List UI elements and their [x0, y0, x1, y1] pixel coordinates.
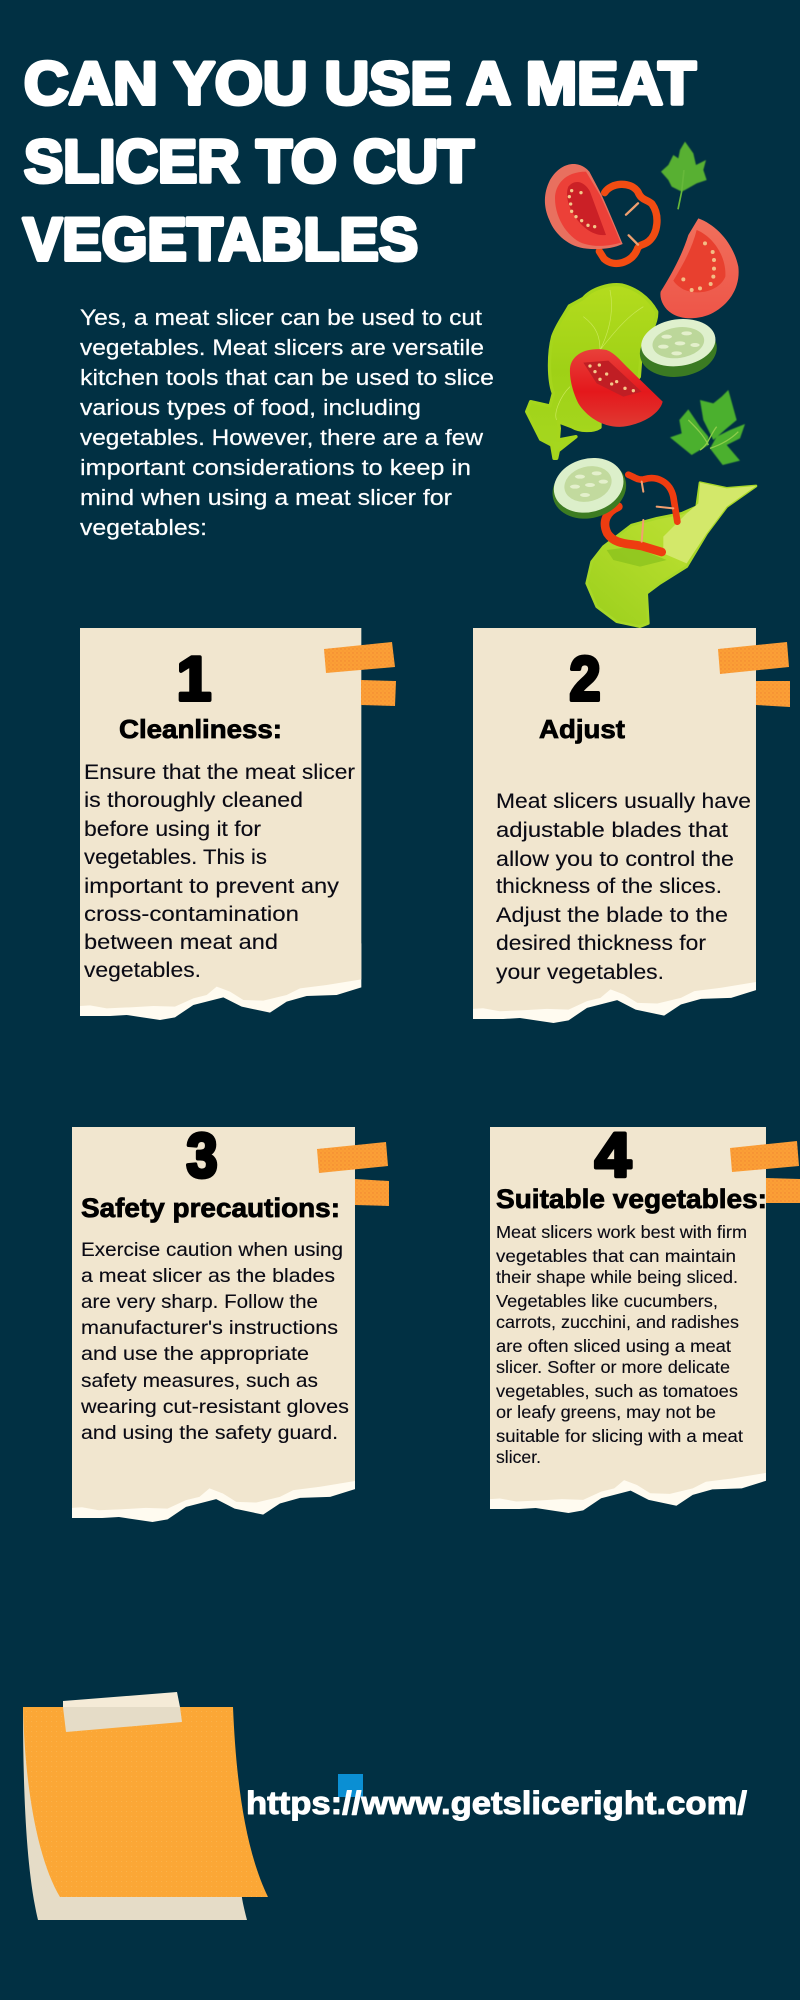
body text [496, 1222, 747, 1467]
title: CAN YOU USE A MEAT [24, 50, 696, 117]
number: 1 [177, 645, 211, 714]
intro text block: important considerations to keep in [80, 455, 471, 480]
body text: thickness of the slices. [496, 875, 722, 898]
body text: Exercise caution when using [81, 1239, 343, 1261]
body text: between meat and [84, 931, 278, 954]
tape [324, 642, 396, 706]
body text: carrots, zucchini, and radishes [496, 1312, 739, 1332]
body text: desired thickness for [496, 932, 706, 955]
tape [730, 1141, 800, 1203]
body text [496, 790, 751, 984]
intro text block: vegetables. Meat slicers are versatile [80, 335, 484, 360]
tape [317, 1142, 389, 1206]
body text: a meat slicer as the blades [81, 1265, 335, 1287]
panel: card 1 [80, 628, 396, 1020]
body text: slicer. Softer or more delicate [496, 1357, 730, 1377]
body text: allow you to control the [496, 848, 734, 871]
title: SLICER TO CUT [24, 128, 474, 195]
heading: Safety precautions: [81, 1193, 340, 1223]
number: 3 [186, 1122, 218, 1191]
body text: manufacturer's instructions [81, 1317, 338, 1339]
body text: safety measures, such as [81, 1370, 318, 1392]
icon: cucumber slice top [636, 314, 720, 382]
heading: Adjust [539, 714, 625, 744]
body text: vegetables, such as tomatoes [496, 1381, 738, 1401]
body text: adjustable blades that [496, 819, 728, 842]
body text: Ensure that the meat slicer [84, 761, 355, 784]
body text: cross-contamination [84, 903, 299, 926]
body text: vegetables that can maintain [496, 1246, 736, 1266]
panel: card 3 [72, 1122, 389, 1522]
blue highlight square [338, 1774, 363, 1797]
tape [718, 642, 790, 707]
body text: or leafy greens, may not be [496, 1402, 716, 1422]
orange sheet [23, 1707, 268, 1897]
number: 2 [570, 645, 600, 714]
icon: back lettuce leaf [527, 285, 657, 458]
torn paper [72, 1127, 355, 1522]
number: 4 [595, 1121, 632, 1190]
icon: parsley sprig top [661, 142, 707, 209]
icon: tomato wedge centre [570, 349, 663, 427]
body text: wearing cut-resistant gloves [80, 1396, 349, 1418]
body text: vegetables. [84, 959, 201, 982]
body text [80, 1239, 349, 1444]
intro text block: kitchen tools that can be used to slice [80, 365, 494, 390]
body text: your vegetables. [496, 961, 664, 984]
body text: are very sharp. Follow the [81, 1291, 318, 1313]
icon: parsley sprig middle [670, 390, 745, 465]
body text: and using the safety guard. [81, 1422, 338, 1444]
intro text block: vegetables: [80, 515, 207, 540]
icon: cucumber slice bottom [546, 450, 633, 527]
body text: Adjust the blade to the [496, 904, 728, 927]
body text: are often sliced using a meat [496, 1336, 731, 1356]
icon: tomato wedge top [545, 164, 623, 249]
body text: suitable for slicing with a meat [496, 1426, 743, 1446]
intro text block: mind when using a meat slicer for [80, 485, 452, 510]
intro text block: Yes, a meat slicer can be used to cut [80, 305, 482, 330]
intro text block: various types of food, including [80, 395, 421, 420]
title [23, 50, 696, 273]
back sheet [23, 1707, 247, 1920]
body text: before using it for [84, 818, 261, 841]
torn paper [490, 1127, 766, 1513]
panel: card 2 [473, 628, 790, 1023]
title: VEGETABLES [23, 206, 418, 273]
body text: important to prevent any [84, 875, 340, 898]
icon: tomato wedge right [660, 218, 739, 318]
icon: front lettuce leaf [587, 483, 756, 627]
torn paper [473, 628, 756, 1023]
body text: is thoroughly cleaned [84, 789, 303, 812]
body text [84, 761, 355, 982]
sticky note [23, 1692, 268, 1920]
heading: Suitable vegetables: [496, 1184, 767, 1214]
note tape [63, 1692, 180, 1707]
illustration: falling vegetables [527, 142, 756, 627]
heading: Cleanliness: [119, 714, 282, 744]
body text: slicer. [496, 1447, 541, 1467]
body text: and use the appropriate [81, 1343, 309, 1365]
intro text block: vegetables. However, there are a few [80, 425, 483, 450]
body text: Vegetables like cucumbers, [496, 1291, 718, 1311]
icon: pepper ring bottom [605, 475, 677, 552]
body text: Meat slicers usually have [496, 790, 751, 813]
intro text block [80, 305, 494, 540]
url text: https://www.getsliceright.com/ [246, 1785, 747, 1821]
body text: their shape while being sliced. [496, 1267, 738, 1287]
panel: card 4 [490, 1121, 800, 1513]
torn paper [80, 628, 361, 1020]
body text: vegetables. This is [84, 846, 267, 869]
body text: Meat slicers work best with firm [496, 1222, 747, 1242]
icon: pepper ring top [599, 184, 657, 263]
